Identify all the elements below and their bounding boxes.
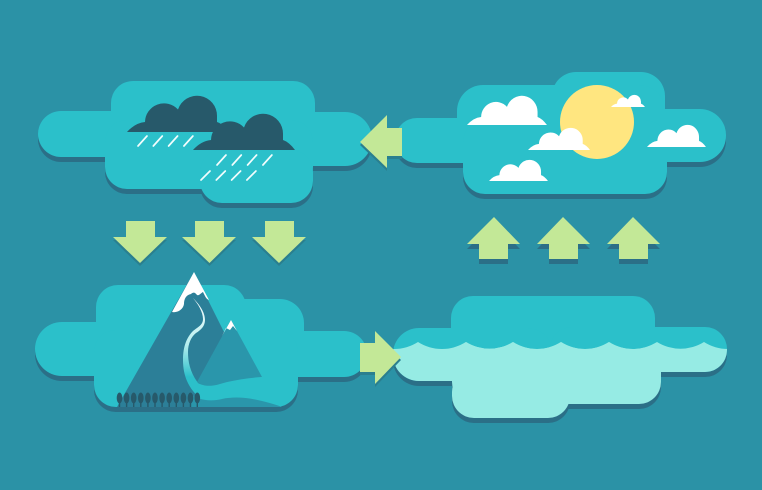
left arrow shadow [360, 118, 402, 171]
panel: ocean [393, 296, 727, 423]
right arrow [360, 331, 401, 384]
water body with waves [394, 342, 727, 418]
big mountain snow cap [172, 272, 209, 312]
up arrow 3 [607, 217, 660, 264]
sky panel shadow [395, 77, 726, 199]
icon: sun [560, 85, 634, 159]
up arrow 1 [467, 217, 520, 264]
panel: rain clouds [38, 81, 372, 208]
up arrow 2 [537, 217, 590, 264]
icon: white cloud right [647, 125, 706, 147]
sky above the water [393, 296, 727, 381]
arrows: falling rain [113, 221, 306, 266]
down arrow 2 [182, 221, 236, 266]
left arrow [360, 115, 402, 168]
right arrow shadow [360, 334, 401, 387]
down arrow 1 [113, 221, 167, 266]
rain panel cloud shape [38, 81, 372, 203]
icon: white cloud small [611, 95, 645, 107]
panel: mountain [35, 272, 367, 412]
icon: white cloud large [467, 96, 547, 125]
panel: sunny sky [395, 72, 726, 199]
arrow: left, rain from sun [360, 115, 402, 171]
icon: white cloud over sun [528, 128, 590, 150]
ocean panel shadow [393, 332, 727, 423]
trees [117, 392, 200, 407]
mountain panel shadow [35, 290, 367, 412]
arrows: rising evaporation [467, 217, 660, 264]
small mountain [197, 320, 262, 388]
small mountain snow cap [222, 320, 237, 336]
arrow: right, mountain to ocean [360, 331, 401, 387]
icon: dark rain cloud right [193, 114, 295, 150]
sky panel cloud shape [395, 72, 726, 194]
icon: white cloud lower [489, 160, 548, 181]
mountain panel cloud shape [35, 285, 367, 407]
ground under river [190, 393, 282, 407]
icon: dark rain cloud left [127, 96, 229, 132]
river [183, 298, 270, 400]
big mountain [117, 272, 245, 407]
down arrow 3 [252, 221, 306, 266]
rain panel shadow [38, 86, 372, 208]
icon: rain drops right [201, 155, 272, 180]
icon: rain drops left [138, 136, 193, 146]
